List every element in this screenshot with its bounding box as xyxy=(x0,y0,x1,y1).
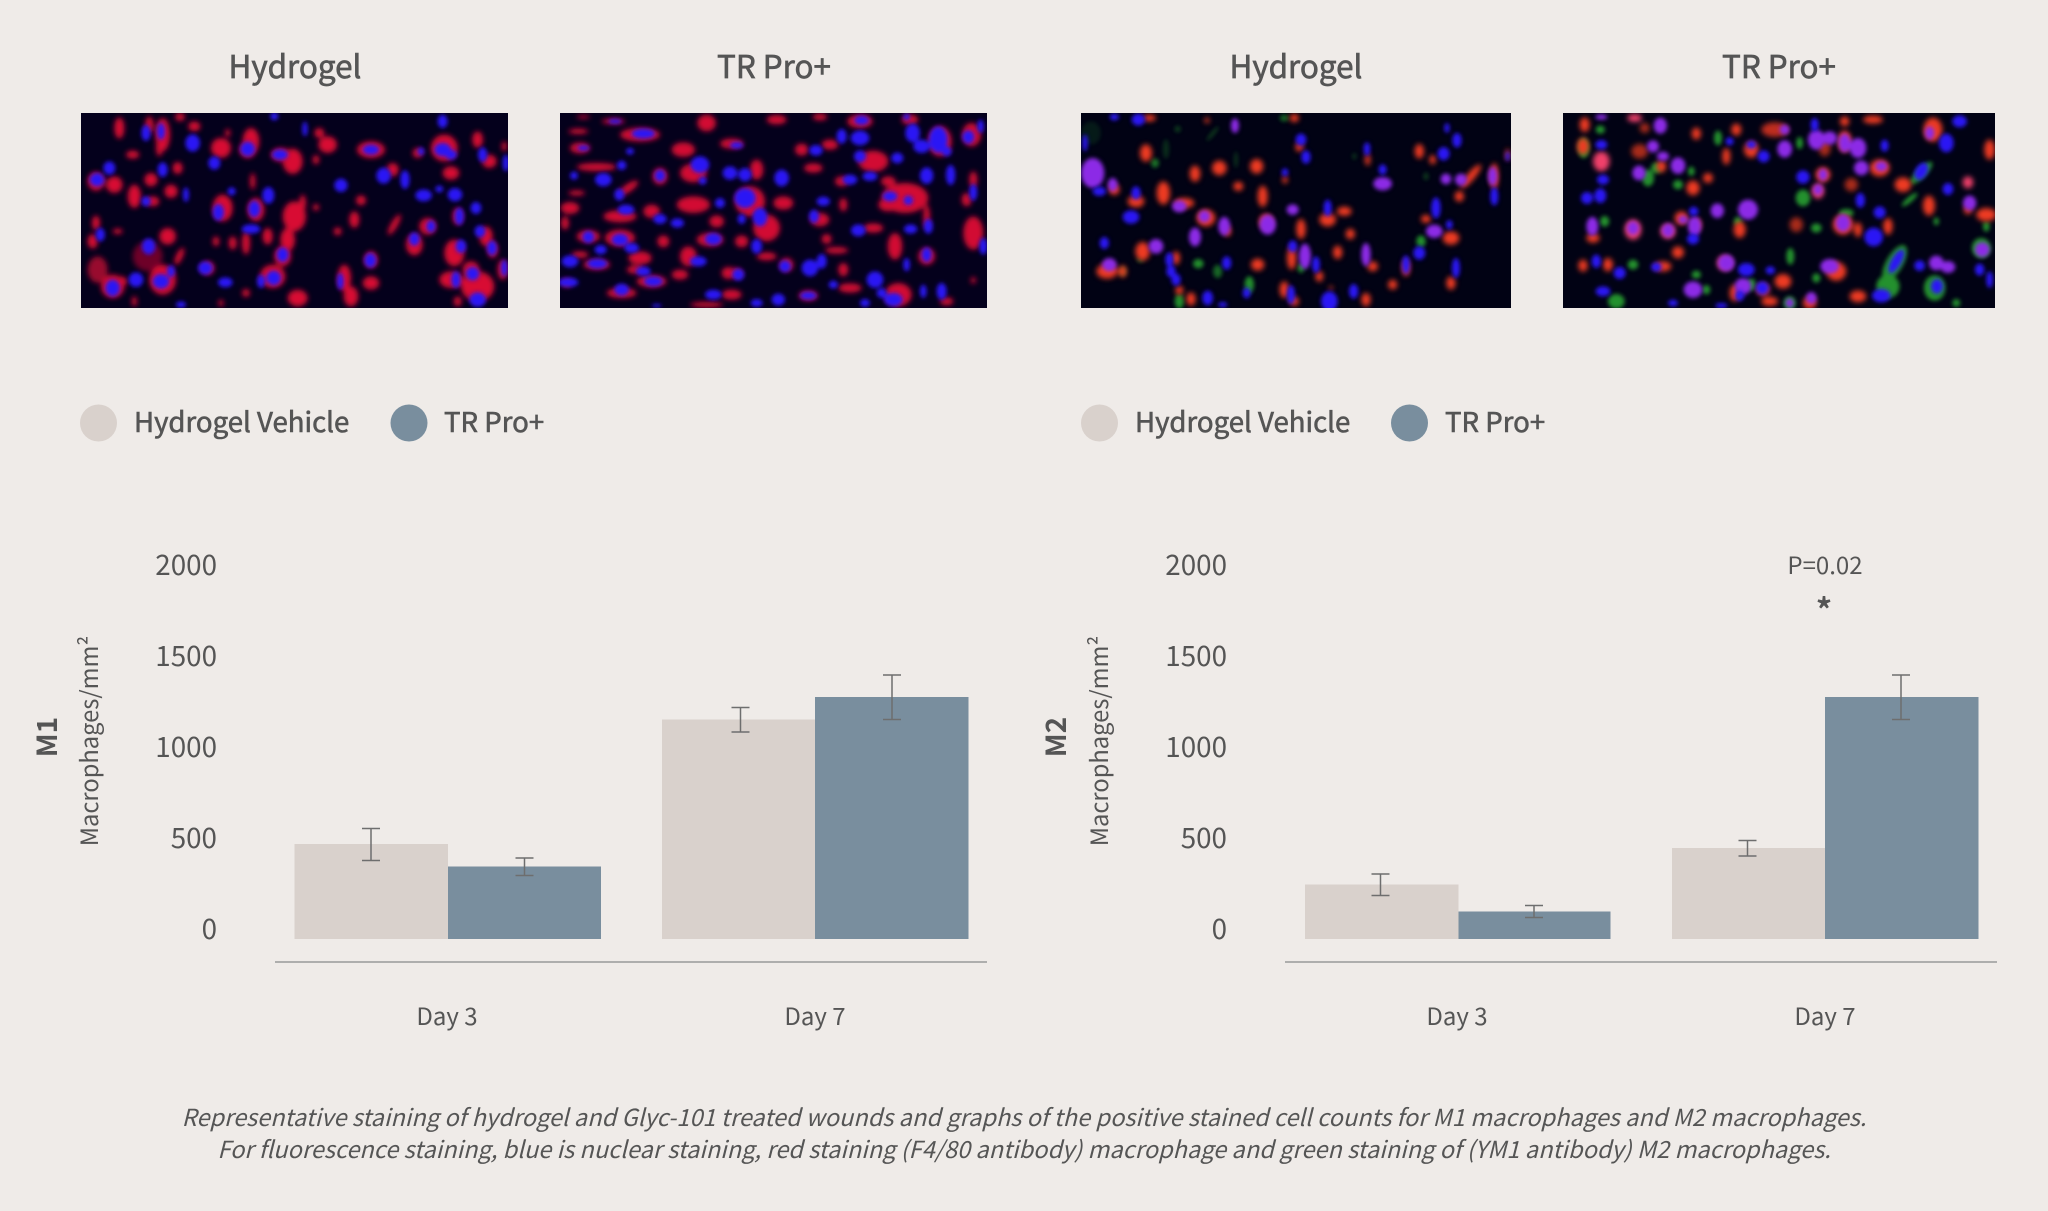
bar chart: M1 macrophages: 0 xyxy=(202,908,217,948)
caption: Representative staining of hydrogel and Glyc-101 treated wounds and graphs of the positive stained cell counts for M1 macrophages and M2 macrophages. xyxy=(182,1099,1866,1133)
bar chart: M2 macrophages: 1000 xyxy=(1165,726,1227,766)
bar chart: M1 macrophages: 2000 xyxy=(155,544,217,584)
legend: M1 panel: TR Pro+ xyxy=(444,400,544,440)
bar chart: M2 macrophages: 2000 xyxy=(1165,544,1227,584)
micrograph: M2 hydrogel staining xyxy=(1081,113,1511,311)
bar chart: M2 macrophages: * xyxy=(1816,586,1832,632)
bar chart: M2 macrophages: Day 7 xyxy=(1794,997,1856,1032)
bar chart: M1 macrophages: 1000 xyxy=(155,726,217,766)
bar chart: M1 macrophages: 500 xyxy=(171,817,217,857)
bar chart: M1 macrophages: Macrophages/mm² xyxy=(71,636,105,846)
title: M1 Hydrogel: Hydrogel xyxy=(229,43,361,88)
legend: M1 panel: Hydrogel Vehicle xyxy=(134,400,349,440)
bar chart: M2 macrophages: 1500 xyxy=(1165,635,1227,675)
title: M1 TR Pro+: TR Pro+ xyxy=(717,43,831,88)
micrograph: M2 TR Pro+ staining xyxy=(1563,113,1996,310)
bar chart: M2 macrophages: Day 3 xyxy=(1426,997,1488,1032)
bar chart: M2 macrophages xyxy=(1035,544,1997,1032)
micrograph: M1 hydrogel staining xyxy=(81,112,509,308)
caption xyxy=(182,1099,1866,1165)
caption: For fluorescence staining, blue is nuclear staining, red staining (F4/80 antibody) macrophage and green staining of (YM1 antibody) M2 macrophages. xyxy=(217,1131,1831,1165)
bar chart: M2 macrophages: 0 xyxy=(1212,908,1227,948)
micrograph: M1 TR Pro+ staining xyxy=(558,113,987,308)
title: M2 Hydrogel: Hydrogel xyxy=(1230,43,1362,88)
bar chart: M1 macrophages: Day 3 xyxy=(416,997,478,1032)
legend: M2 panel: TR Pro+ xyxy=(1445,400,1545,440)
bar chart: M2 macrophages: M2 xyxy=(1035,717,1075,757)
bar chart: M1 macrophages: M1 xyxy=(26,717,66,757)
bar chart: M1 macrophages: 1500 xyxy=(155,635,217,675)
bar chart: M2 macrophages: Macrophages/mm² xyxy=(1081,636,1115,846)
bar chart: M1 macrophages xyxy=(26,544,987,1032)
legend: M2 panel xyxy=(1081,400,1545,442)
bar chart: M2 macrophages: 500 xyxy=(1181,817,1227,857)
title: M2 TR Pro+: TR Pro+ xyxy=(1722,43,1836,88)
bar chart: M2 macrophages: P=0.02 xyxy=(1787,546,1863,581)
legend: M2 panel: Hydrogel Vehicle xyxy=(1135,400,1350,440)
bar chart: M1 macrophages: Day 7 xyxy=(784,997,846,1032)
legend: M1 panel xyxy=(80,400,544,442)
